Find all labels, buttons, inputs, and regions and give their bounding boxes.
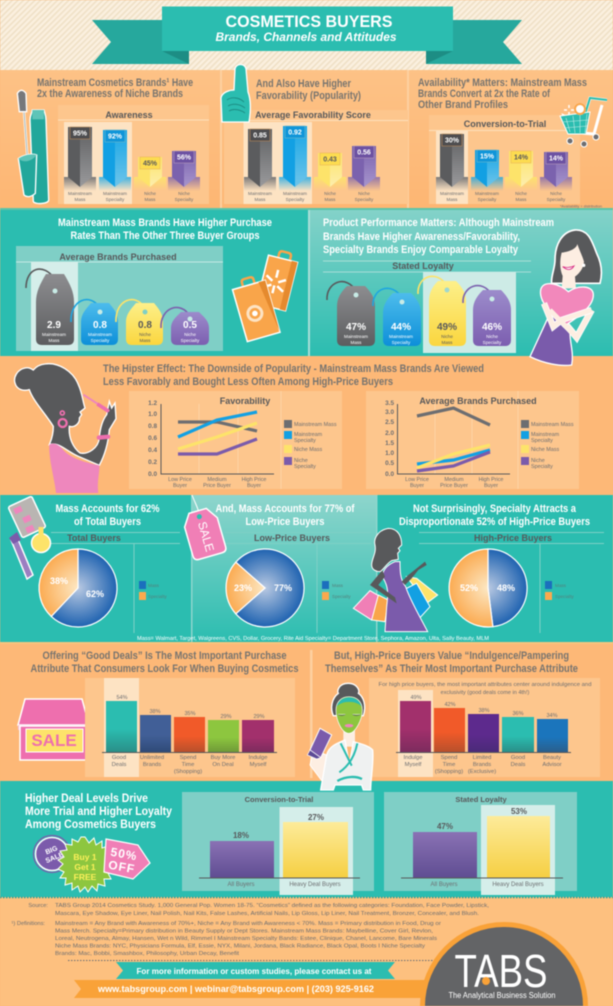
chart: high price attributes: exclusivity (good deals come in 4th!) (441, 690, 529, 696)
heading: 2x the Awareness of Niche Brands (37, 88, 183, 100)
note: Mass= Walmart, Target, Walgreens, CVS, Dollar, Grocery, Rite Aid Specialty= Department Store, Sephora, Amazon, Ulta, Sally Beauty, MLM (137, 636, 489, 642)
legend: low price: Specialty (332, 594, 351, 599)
chart: average brands purchased: High Price (479, 477, 503, 483)
bar: mainstream specialty 0.92: Mainstream (283, 191, 307, 196)
chart: high price attributes: 42% (444, 702, 456, 708)
source: Source: (28, 903, 48, 909)
icon: deal badges: FREE (74, 872, 97, 882)
bar: mainstream mass 30% (436, 134, 468, 202)
tag: mainstream mass 47%: Mainstream (344, 334, 368, 339)
chart title: total buyers: Total Buyers (67, 533, 121, 543)
pie: total buyers (39, 549, 117, 627)
bar: mainstream mass 0.85: Mass (255, 197, 266, 202)
chart: average brands purchased (366, 391, 579, 489)
ribbon: contact: For more information or custom studies, please contact us at (136, 966, 372, 976)
chart: stated loyalty: 53% (511, 807, 527, 816)
legend: total buyers: Specialty (148, 594, 167, 599)
chart: purchase attributes: 29% (220, 714, 232, 720)
source: Mascara, Eye Shadow, Eye Liner, Nail Polish, Nail Kits, False Lashes, Artificial Nails, Lip Gloss, Lip Liner, Nail Treatment, Bronzer, Concealer, and Blush. (55, 911, 479, 917)
tag: niche mass 49%: Niche (441, 334, 453, 339)
heading: Mainstream Mass Brands Have Higher Purchase (58, 217, 272, 229)
chart: high price attributes: Brands (473, 762, 491, 768)
heading (103, 363, 484, 388)
bar: mainstream mass 30%: 30% (445, 138, 460, 144)
chart title: Stated Loyalty (455, 795, 507, 804)
chart: purchase attributes: 29% (253, 714, 265, 720)
heading: high price buyers: Not Surprisingly, Specialty Attracts a (413, 503, 577, 515)
heading: Rates Than The Other Three Buyer Groups (70, 230, 260, 242)
heading: Attribute That Consumers Look For When Buying Cosmetics (30, 663, 298, 675)
definitions: Loreal, Neutrogena, Almay, Hansen, Wet n Wild, Rimmel I Mainstream Specialty Bands: Estee, Clinique, Chanel, Lancome, Bare Minerals (55, 936, 437, 942)
pie: total buyers: 38% (50, 576, 68, 586)
panel: row 4 pies (0, 495, 613, 644)
icon: sale storefront: SALE (31, 731, 77, 750)
icon: shopping cart (560, 98, 607, 147)
tag: mainstream specialty 44%: Specialty (392, 340, 411, 345)
bar: niche specialty 14%: Niche (550, 191, 562, 196)
tag: mainstream mass 2.9: 2.9 (47, 320, 61, 331)
heading: And Also Have Higher (256, 78, 352, 90)
bar: niche mass 14%: 14% (514, 154, 529, 162)
tag: niche specialty 0.5: Niche (184, 332, 196, 337)
heading: low price buyers (216, 503, 355, 528)
bar: niche specialty 14% (540, 152, 572, 202)
bar: niche specialty 56%: Niche (178, 191, 190, 196)
bar: niche specialty 0.56 (348, 146, 380, 202)
chart: purchase attributes: 38% (149, 709, 161, 715)
chart: purchase attributes: (Shopping) (174, 769, 202, 775)
definitions: ¹) Definitions: (11, 921, 45, 927)
tag: niche mass 0.8: Mass (140, 338, 151, 343)
chart: purchase attributes: 35% (184, 711, 196, 717)
legend (284, 420, 337, 470)
chart: average brands purchased: 3.0 (385, 409, 394, 416)
pie: low price buyers (226, 549, 304, 627)
legend: high price (545, 581, 574, 600)
chart: purchase attributes: Deals (112, 762, 127, 768)
chart: high price attributes (369, 678, 600, 777)
heading: More Trial and Higher Loyalty (25, 806, 173, 818)
legend: Mainstream Mass (294, 422, 337, 428)
legend: Mainstream Mass (531, 422, 574, 428)
bar: mainstream mass 30%: Mainstream (440, 191, 464, 196)
chart: favorability: 0.8 (148, 423, 157, 430)
bar: mainstream specialty 15%: 15% (480, 154, 495, 160)
panel: title ribbon (92, 6, 522, 64)
chart: purchase attributes: Spend (180, 755, 196, 761)
tag: mainstream mass 2.9 (26, 269, 74, 345)
chart: conversion-to-trial: All Buyers (227, 882, 255, 888)
chart: average brands purchased: Price Buyer (440, 483, 468, 489)
bar: niche mass 45% (134, 157, 166, 202)
legend: Mainstream (531, 432, 560, 438)
bar: mainstream mass 95%: Mass (75, 197, 86, 202)
ribbon: contact: www.tabsgroup.com | webinar@tabsgroup.com | (203) 925-9162 (97, 984, 374, 994)
tag: mainstream specialty 0.8 (71, 300, 118, 345)
heading: Other Brand Profiles (418, 99, 508, 111)
heading: Higher Deal Levels Drive (25, 793, 148, 805)
heading (30, 650, 298, 675)
chart: average brands purchased: Buyer (484, 483, 498, 489)
tag: niche mass 49%: 49% (437, 322, 457, 333)
chart: average brands purchased: 2.0 (385, 430, 394, 437)
legend: high price: Specialty (555, 594, 574, 599)
chart: average brands purchased: Medium (444, 477, 464, 483)
chart: purchase attributes (85, 678, 295, 777)
chart: purchase attributes: Unlimited (140, 755, 164, 761)
bar: niche specialty 0.56: 0.56 (357, 150, 371, 156)
chart: high price attributes: Limited (473, 755, 491, 761)
definitions: Brands: Mac, Bobbi, Smashbox, Philosophy, Urban Decay, Benefit (55, 951, 239, 957)
bar: niche mass 45%: 45% (143, 160, 158, 168)
chart: high price attributes: 38% (478, 708, 490, 714)
heading: total buyers (56, 503, 160, 528)
bar: niche mass 0.43 (314, 153, 346, 202)
icon: foam finger (221, 64, 250, 122)
bar: niche mass 0.43: Niche (324, 191, 336, 196)
bar: niche mass 0.43: 0.43 (323, 156, 337, 164)
chart title: Average Favorability Score (255, 110, 371, 120)
chart: average brands purchased: 3.5 (385, 400, 394, 407)
bar: mainstream specialty 0.92: Specialty (286, 197, 305, 202)
bar: niche mass 45%: Niche (144, 191, 156, 196)
source: TABS Group 2014 Cosmetics Study. 1,000 General Pop. Women 18-75. “Cosmetics” defined as the following categories: Foundation, Face Powder, Lipstick, (55, 903, 489, 909)
ribbon: contact (74, 962, 440, 998)
footnote: *Availability = distribution (560, 204, 602, 208)
chart: high price attributes: Indulge (403, 755, 423, 761)
chart: purchase attributes: Indulge (248, 755, 268, 761)
bar: niche mass 14% (505, 151, 537, 202)
legend: Specialty (294, 438, 316, 444)
bar: mainstream mass 95%: 95% (73, 130, 88, 138)
chart: purchase attributes: Myself (250, 762, 267, 768)
tag: mainstream specialty 0.8: Specialty (91, 338, 110, 343)
chart title: Average Brands Purchased (419, 396, 537, 406)
chart: purchase attributes: Brands (143, 762, 161, 768)
panel: awareness (17, 77, 209, 204)
panel: row 5 left good deals (0, 644, 613, 782)
panel: row 2 right (308, 210, 613, 356)
tag: mainstream mass 2.9: Mainstream (42, 332, 66, 337)
chart: high price attributes: (Exclusive) (468, 769, 496, 775)
legend: Niche (531, 458, 545, 464)
heading: Among Cosmetics Buyers (25, 819, 156, 831)
chart: average brands purchased: 0.5 (385, 460, 394, 467)
tag: mainstream mass 47%: Mass (351, 340, 362, 345)
icon: deal badges: OFF (107, 858, 136, 876)
definitions: Mass Merch. Specialty=Primary distribution in Beauty Supply or Dept Stores. Mainstream Mass Brands: Maybelline, Cover Girl, Revlon, (55, 928, 433, 934)
tag: niche mass 49%: Mass (442, 340, 453, 345)
pie: low price buyers: 23% (234, 583, 252, 593)
logo: TABS: The Analytical Business Solution (448, 991, 556, 1000)
bar: niche specialty 14%: Specialty (547, 197, 566, 202)
icon: mascara (17, 90, 49, 204)
icon: makeup (8, 496, 50, 579)
bar: mainstream specialty 15%: Mainstream (475, 191, 499, 196)
pie: total buyers: 62% (86, 589, 104, 599)
heading (323, 217, 554, 256)
chart: high price attributes: Spend (441, 755, 457, 761)
chart: average brands purchased: 2.5 (385, 419, 394, 426)
tag: niche mass 0.8 (116, 300, 163, 345)
chart: high price attributes: Beauty (543, 755, 561, 761)
chart: favorability: Buyer (173, 483, 187, 489)
chart: purchase attributes: 54% (116, 695, 128, 701)
heading (325, 650, 578, 675)
tag: niche mass 49% (418, 276, 466, 346)
chart: stated loyalty (384, 792, 577, 895)
chart: average brands purchased: Buyer (410, 483, 424, 489)
chart: high price attributes: Time (443, 762, 455, 768)
tag: mainstream specialty 44%: Mainstream (389, 334, 413, 339)
chart: conversion-to-trial: 18% (233, 831, 249, 840)
logo: TABS (420, 922, 588, 1006)
tag: niche specialty 0.5: Specialty (181, 338, 200, 343)
bar: mainstream mass 95% (64, 127, 96, 202)
tag: niche specialty 46%: 46% (482, 322, 502, 333)
chart: high price attributes: Myself (405, 762, 422, 768)
heading: low price buyers: And, Mass Accounts for 77% of (216, 503, 355, 515)
heading: low price buyers: Low-Price Buyers (246, 516, 324, 528)
background hatch (0, 0, 613, 72)
tag: mainstream specialty 44%: 44% (391, 322, 411, 333)
chart: stated loyalty: All Buyers (430, 882, 458, 888)
chart: favorability: Low Price (168, 477, 192, 483)
pie: low price buyers: 77% (274, 583, 292, 593)
bar: mainstream specialty 92%: 92% (108, 134, 123, 140)
chart title: Awareness (105, 110, 153, 120)
legend: Specialty (294, 464, 316, 470)
bar: mainstream mass 95%: Mainstream (68, 191, 92, 196)
chart: average brands purchased: Low Price (405, 477, 429, 483)
bar: mainstream specialty 15% (471, 150, 503, 202)
icon: deal badges (34, 836, 150, 892)
icon: sale tag: SALE (195, 520, 217, 553)
subtitle: Brands, Channels and Attitudes (216, 30, 397, 44)
title: COSMETICS BUYERS (226, 12, 392, 31)
chart: favorability: 0.4 (148, 447, 157, 454)
illustration: woman with face mask (307, 683, 373, 790)
heading: high price buyers (399, 503, 590, 528)
bar: niche specialty 14%: 14% (549, 156, 564, 162)
panel: conversion (418, 77, 607, 208)
legend: Specialty (531, 438, 553, 444)
chart: purchase attributes: On Deal (212, 762, 234, 768)
icon: deal badges: Buy 1 (73, 852, 97, 862)
chart: stated loyalty: Heavy Deal Buyers (492, 882, 544, 888)
icon: deal badges: SALE (45, 851, 65, 865)
legend: low price (322, 581, 351, 600)
bar: mainstream mass 0.85: 0.85 (253, 132, 267, 140)
bar: niche mass 45%: Mass (145, 197, 156, 202)
chart: favorability: 0.0 (148, 471, 157, 478)
pie: high price buyers (449, 549, 527, 627)
icon: sale tag (181, 495, 227, 561)
chart: favorability: Buyer (247, 483, 261, 489)
legend: Niche Mass (294, 447, 322, 453)
panel: favorability (221, 64, 408, 204)
pie: high price buyers: 52% (460, 583, 478, 593)
chart: favorability: Medium (207, 477, 227, 483)
bar: mainstream specialty 0.92 (279, 126, 311, 202)
bar: niche specialty 0.56: Specialty (355, 197, 374, 202)
icon: deal badges: 50% (110, 845, 139, 863)
panel: row 6 deal levels (0, 781, 613, 897)
heading: Product Performance Matters: Although Mainstream (323, 217, 554, 229)
legend: Niche Mass (531, 447, 559, 453)
illustration: woman hugging heart (530, 230, 601, 365)
illustration: shopper with bags (353, 528, 438, 632)
legend: Niche (294, 458, 308, 464)
heading: Less Favorably and Bought Less Often Among High-Price Buyers (103, 376, 393, 388)
legend: Mainstream (294, 432, 323, 438)
chart: favorability: 1.2 (148, 400, 157, 407)
chart: favorability: 0.2 (148, 459, 157, 466)
bar: mainstream specialty 92%: Mainstream (103, 191, 127, 196)
heading: Brands Have Higher Awareness/Favorability, (323, 231, 520, 243)
tag: niche mass 0.8: Niche (139, 332, 151, 337)
chart: average brands purchased: 1.0 (385, 450, 394, 457)
heading (58, 217, 272, 242)
bar: mainstream specialty 0.92: 0.92 (288, 130, 302, 136)
bar: niche specialty 56%: 56% (177, 154, 192, 162)
illustration: woman applying mascara (15, 364, 116, 493)
heading (256, 78, 361, 102)
tag: niche mass 0.8: 0.8 (138, 320, 152, 331)
heading: Specialty Brands Enjoy Comparable Loyalty (323, 244, 519, 256)
legend: Specialty (531, 464, 553, 470)
bar: niche mass 0.43: Mass (325, 197, 336, 202)
chart: high price attributes: For high price buyers, the most important attributes center around indulgence and (378, 682, 592, 688)
heading: Mainstream Cosmetics Brands¹ Have (37, 77, 193, 89)
definitions: Niche Mass Brands: NYC, Physicians Formula, Elf, Essie, NYX, Milani, Jordana, Black Radiance, Black Opal, Boots I Niche Specialty (55, 944, 425, 950)
heading: The Hipster Effect: The Downside of Popularity - Mainstream Mass Brands Are Viewed (103, 363, 484, 375)
bar: niche specialty 56%: Specialty (175, 197, 194, 202)
chart: stated loyalty: 47% (437, 822, 453, 831)
chart title: Conversion-to-Trial (464, 119, 546, 129)
tag: mainstream specialty 0.8: Mainstream (88, 332, 112, 337)
icon: deal badges: Get 1 (74, 862, 96, 872)
heading: total buyers: Mass Accounts for 62% (56, 503, 160, 515)
bar: niche specialty 56% (168, 151, 200, 202)
definitions: Mainstream = Any Brand with Awareness of 70%+, Niche = Any Brand with Awareness < 70%. Mass = Primary distribution in Food, Drug or (55, 921, 441, 927)
heading: Offering “Good Deals” Is The Most Important Purchase (42, 650, 286, 662)
icon: shopping bags (231, 248, 299, 342)
chart title: Stated Loyalty (392, 261, 454, 271)
tag: mainstream mass 47%: 47% (346, 322, 366, 333)
heading: Favorability (Popularity) (256, 90, 361, 102)
chart title: low price: Low-Price Buyers (254, 533, 330, 543)
chart: average brands purchased: 1.5 (385, 440, 394, 447)
bar: mainstream specialty 92%: Specialty (106, 197, 125, 202)
tag: niche specialty 0.5: 0.5 (183, 320, 197, 331)
chart title: Average Brands Purchased (59, 252, 177, 262)
chart: average brands purchased: 0.0 (385, 471, 394, 478)
bar: niche mass 14%: Mass (516, 197, 527, 202)
heading: But, High-Price Buyers Value “Indulgence/Pampering (334, 650, 569, 662)
chart: high price attributes: 36% (512, 711, 524, 717)
tag: mainstream mass 2.9: Mass (49, 338, 60, 343)
chart: high price attributes: (Shopping) (435, 769, 463, 775)
panel: row 2 left (0, 210, 308, 356)
heading (25, 793, 173, 831)
source (28, 903, 489, 917)
panel: row 1 background (0, 70, 613, 210)
chart: high price attributes: Good (511, 755, 525, 761)
tag: mainstream specialty 44% (373, 288, 421, 346)
tag: mainstream mass 47% (327, 282, 375, 346)
chart: favorability: 0.6 (148, 435, 157, 442)
chart: favorability: 1.0 (148, 411, 157, 418)
chart title: Conversion-to-Trial (245, 795, 313, 804)
tag: mainstream specialty 0.8: 0.8 (93, 320, 107, 331)
tag: niche specialty 46%: Niche (486, 334, 498, 339)
tag: niche specialty 0.5 (161, 307, 209, 345)
heading (418, 77, 587, 111)
tag: niche specialty 46%: Specialty (483, 340, 502, 345)
icon: deal badges: BIG (45, 845, 59, 856)
bar: mainstream mass 0.85: Mainstream (248, 191, 272, 196)
panel: row 5 right indulgence (325, 650, 600, 777)
chart: high price attributes: Advisor (542, 762, 562, 768)
bar: mainstream specialty 15%: Specialty (478, 197, 497, 202)
logo: TABS: TABS (454, 945, 548, 997)
chart: purchase attributes: Buy More (211, 755, 235, 761)
chart: high price attributes: Deals (511, 762, 526, 768)
panel: footer (0, 897, 613, 1006)
bar: mainstream mass 0.85 (244, 129, 276, 202)
heading: Brands Convert at 2x the Rate of (418, 88, 550, 100)
chart: favorability: Price Buyer (203, 483, 231, 489)
chart: favorability: High Price (242, 477, 266, 483)
legend: low price: Mass (332, 583, 344, 588)
bar: niche mass 14%: Niche (515, 191, 527, 196)
bar: mainstream mass 30%: Mass (447, 197, 458, 202)
heading (37, 77, 193, 100)
bar: mainstream specialty 92% (99, 130, 131, 202)
chart: conversion-to-trial (182, 792, 374, 895)
bar: niche specialty 0.56: Niche (358, 191, 370, 196)
chart: purchase attributes: Good (112, 755, 126, 761)
panel: row 3 hipster effect (0, 356, 613, 495)
legend (521, 420, 574, 470)
definitions (11, 921, 441, 957)
chart: purchase attributes: Time (182, 762, 194, 768)
chart: conversion-to-trial: 27% (308, 813, 324, 822)
legend: total buyers: Mass (148, 583, 160, 588)
chart title: high price: High-Price Buyers (474, 533, 552, 543)
chart: high price attributes: 49% (410, 695, 422, 701)
legend: total buyers (139, 581, 167, 600)
chart title: Favorability (220, 396, 270, 406)
chart: high price attributes: 34% (546, 713, 558, 719)
legend: high price: Mass (555, 583, 567, 588)
tag: niche specialty 46% (463, 286, 511, 346)
chart: favorability (129, 391, 342, 489)
pie: high price buyers: 48% (497, 583, 515, 593)
heading: total buyers: of Total Buyers (74, 516, 141, 528)
icon: sale storefront (18, 699, 89, 760)
chart: conversion-to-trial: Heavy Deal Buyers (289, 882, 341, 888)
